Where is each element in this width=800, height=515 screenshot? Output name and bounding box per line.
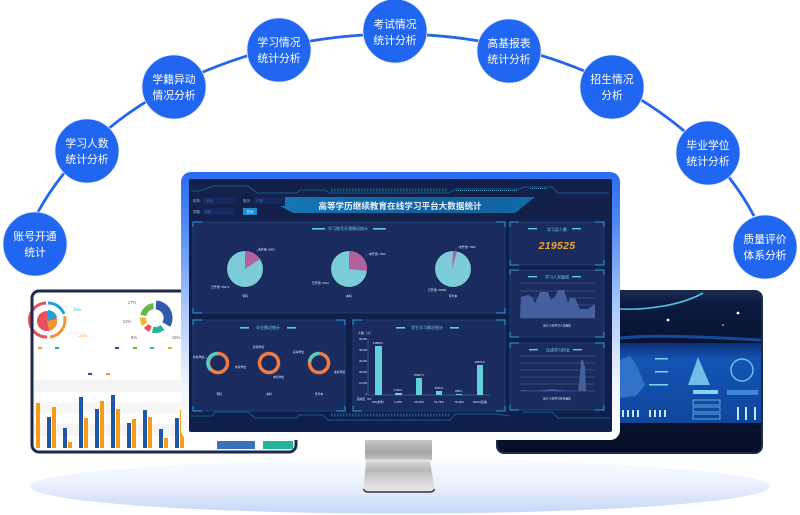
node: 招生情况分析 (580, 55, 644, 119)
node: 高基报表统计分析: 统计分析 (487, 52, 531, 66)
pie 2 (312, 251, 386, 298)
panel: 学生学习情况统计: 3535人 (434, 386, 444, 390)
filter controls: 全部 (206, 198, 213, 203)
filter controls: 不限 (204, 209, 211, 214)
panel: 学生学习情况统计: 51-75% (434, 400, 444, 404)
pie 1: 未开通: 5000 (258, 246, 275, 252)
donut 3: 获得学位 (293, 350, 304, 354)
donut 2: 本科 (266, 392, 272, 396)
node: 考试情况统计分析 (363, 0, 427, 63)
filter controls: 不限 (256, 198, 263, 203)
pie 1: 已开通: 35971 (211, 284, 230, 289)
filter controls: 查询 (247, 209, 254, 214)
pie 2: 未开通: 7812 (369, 251, 386, 256)
bar chart (47, 395, 179, 448)
node: 账号开通统计: 统计 (24, 246, 46, 259)
panel: 学习人次曲线: 近三十天学习人次趋势 (543, 324, 571, 328)
node: 学习人数统计分析 (55, 119, 119, 183)
pie cluster: 33% (73, 307, 81, 312)
platform title: 高等学历继续教育在线学习平台大数据统计 (318, 200, 482, 211)
pie 3: 专升本 (449, 293, 457, 298)
panel: 学生学习情况统计: 100%(完成) (473, 400, 487, 404)
y axis ticks: 10,000 (359, 381, 368, 385)
panel: 学生学习情况统计: 15597人 (414, 373, 424, 377)
panel: 学习人次曲线 (510, 270, 604, 337)
donut 1 (193, 353, 246, 396)
monitor bezel (181, 172, 620, 440)
node: 学习人数统计分析: 统计分析 (65, 152, 109, 166)
y axis ticks: 0 (366, 392, 368, 396)
cone chart (688, 357, 710, 385)
pie 1: 专科 (242, 293, 248, 298)
donut chart (143, 305, 168, 330)
pie cluster (29, 303, 87, 338)
pie 1 (211, 246, 275, 298)
donut labels: 15% (172, 335, 180, 340)
pie cluster: 24% (79, 333, 87, 338)
donut labels (123, 300, 180, 340)
pie 2: 本科 (346, 293, 352, 298)
y axis ticks: 40,000 (359, 348, 368, 352)
panel: 学生学习情况统计: 26-50% (414, 400, 424, 404)
filter controls: 学期: (193, 209, 201, 214)
panel: 学生学习情况统计: 0%(未学) (372, 400, 384, 404)
left side screen (29, 291, 296, 452)
pie 3: 已开通: 40484 (428, 287, 447, 292)
filter controls (193, 197, 284, 215)
donut 3: 专升本 (315, 392, 323, 396)
node: 学习情况统计分析: 学习情况 (257, 35, 301, 49)
donut 1: 获得学位 (193, 355, 204, 359)
small bar groups (622, 407, 756, 420)
filter controls: 批次: (243, 198, 251, 203)
panel: 学习总人数 (510, 222, 604, 265)
right side screen (497, 291, 762, 453)
donut 2 (253, 345, 284, 396)
panel: 学生学习情况统计: 43888人 (373, 341, 383, 345)
panel: 学生学习情况统计: 学生学习情况统计 (411, 324, 443, 330)
panel: 学习人次曲线: 学习人次曲线 (545, 274, 569, 280)
donut 1: 专科 (216, 392, 222, 396)
node: 质量评价体系分析: 体系分析 (743, 248, 787, 262)
panel: 学生学习情况统计 (353, 320, 505, 411)
donut 1: 未获学位 (235, 365, 246, 369)
pie 3: 未开通: 7462 (459, 244, 476, 249)
panel: 学生学习情况统计: 76-99% (454, 400, 464, 404)
panel: 在线学习时长 (510, 343, 604, 410)
map shape (620, 356, 645, 398)
panel: 学生学习情况统计: 完成度（%） (357, 397, 373, 401)
node: 考试情况统计分析: 统计分析 (373, 33, 417, 47)
top ornament line (191, 186, 609, 193)
node: 毕业学位统计分析: 毕业学位 (686, 138, 730, 152)
panel: 学习账号开通情况统计: 学习账号开通情况统计 (328, 225, 368, 231)
panel: 毕业情况统计: 毕业情况统计 (256, 324, 280, 330)
panel: 学生学习情况统计: 1736人 (393, 388, 403, 392)
node: 高基报表统计分析: 高基报表 (487, 36, 531, 50)
platform title (280, 197, 535, 213)
node: 高基报表统计分析 (477, 19, 541, 83)
node: 学习情况统计分析: 统计分析 (257, 51, 301, 65)
y axis ticks: 30,000 (359, 359, 368, 363)
panel: 在线学习时长: 近三十天学习时长趋势 (543, 396, 571, 400)
connecting arc (38, 34, 754, 216)
node: 毕业学位统计分析 (676, 121, 740, 185)
node: 账号开通统计 (3, 212, 67, 276)
donut 2: 获得学位 (253, 345, 264, 349)
donut 3: 未获学位 (334, 370, 345, 374)
panel: 学生学习情况统计: 1-25% (394, 400, 403, 404)
y axis ticks: 20,000 (359, 370, 368, 374)
panel: 学习总人数: 219525 (538, 240, 575, 252)
donut labels: 12% (123, 319, 131, 324)
node: 学籍异动情况分析: 情况分析 (152, 88, 196, 102)
node: 学习人数统计分析: 学习人数 (65, 136, 109, 150)
donut 3 (293, 350, 345, 396)
bottom ornament line (190, 412, 610, 420)
node: 招生情况分析: 招生情况 (590, 72, 634, 86)
filter controls: 机构: (193, 198, 201, 203)
panel: 毕业情况统计 (193, 320, 345, 411)
panel: 学习总人数: 学习总人数 (547, 226, 567, 232)
panel: 在线学习时长: 在线学习时长 (546, 346, 570, 352)
node: 毕业学位统计分析: 统计分析 (686, 154, 730, 168)
y axis ticks (359, 337, 368, 396)
node: 账号开通统计: 账号开通 (13, 230, 57, 243)
legend markers (38, 347, 172, 375)
node: 招生情况分析: 分析 (601, 88, 623, 102)
lower tiles (217, 441, 255, 449)
panel: 学生学习情况统计: 人数（人） (358, 330, 373, 335)
pie 3 (428, 244, 476, 298)
node: 质量评价体系分析 (733, 215, 797, 279)
panel: 学习账号开通情况统计 (193, 222, 505, 313)
node: 考试情况统计分析: 考试情况 (373, 18, 417, 31)
node: 学籍异动情况分析: 学籍异动 (152, 72, 196, 86)
pie 2: 已开通: 2194 (312, 280, 329, 285)
donut labels: 17% (128, 300, 136, 305)
donut 2: 未获学位 (273, 375, 284, 379)
base ellipse shadow (30, 460, 770, 514)
donut labels: 9% (131, 335, 137, 340)
monitor screen (189, 179, 612, 432)
panel: 学生学习情况统计: 29874人 (475, 360, 485, 364)
y axis ticks: 50,000 (359, 337, 368, 341)
node: 学籍异动情况分析 (142, 55, 206, 119)
node: 学习情况统计分析 (247, 18, 311, 82)
monitor stand (363, 440, 435, 492)
panel: 学生学习情况统计: 888人 (455, 389, 463, 393)
bars (375, 346, 483, 395)
node: 质量评价体系分析: 质量评价 (743, 233, 787, 246)
